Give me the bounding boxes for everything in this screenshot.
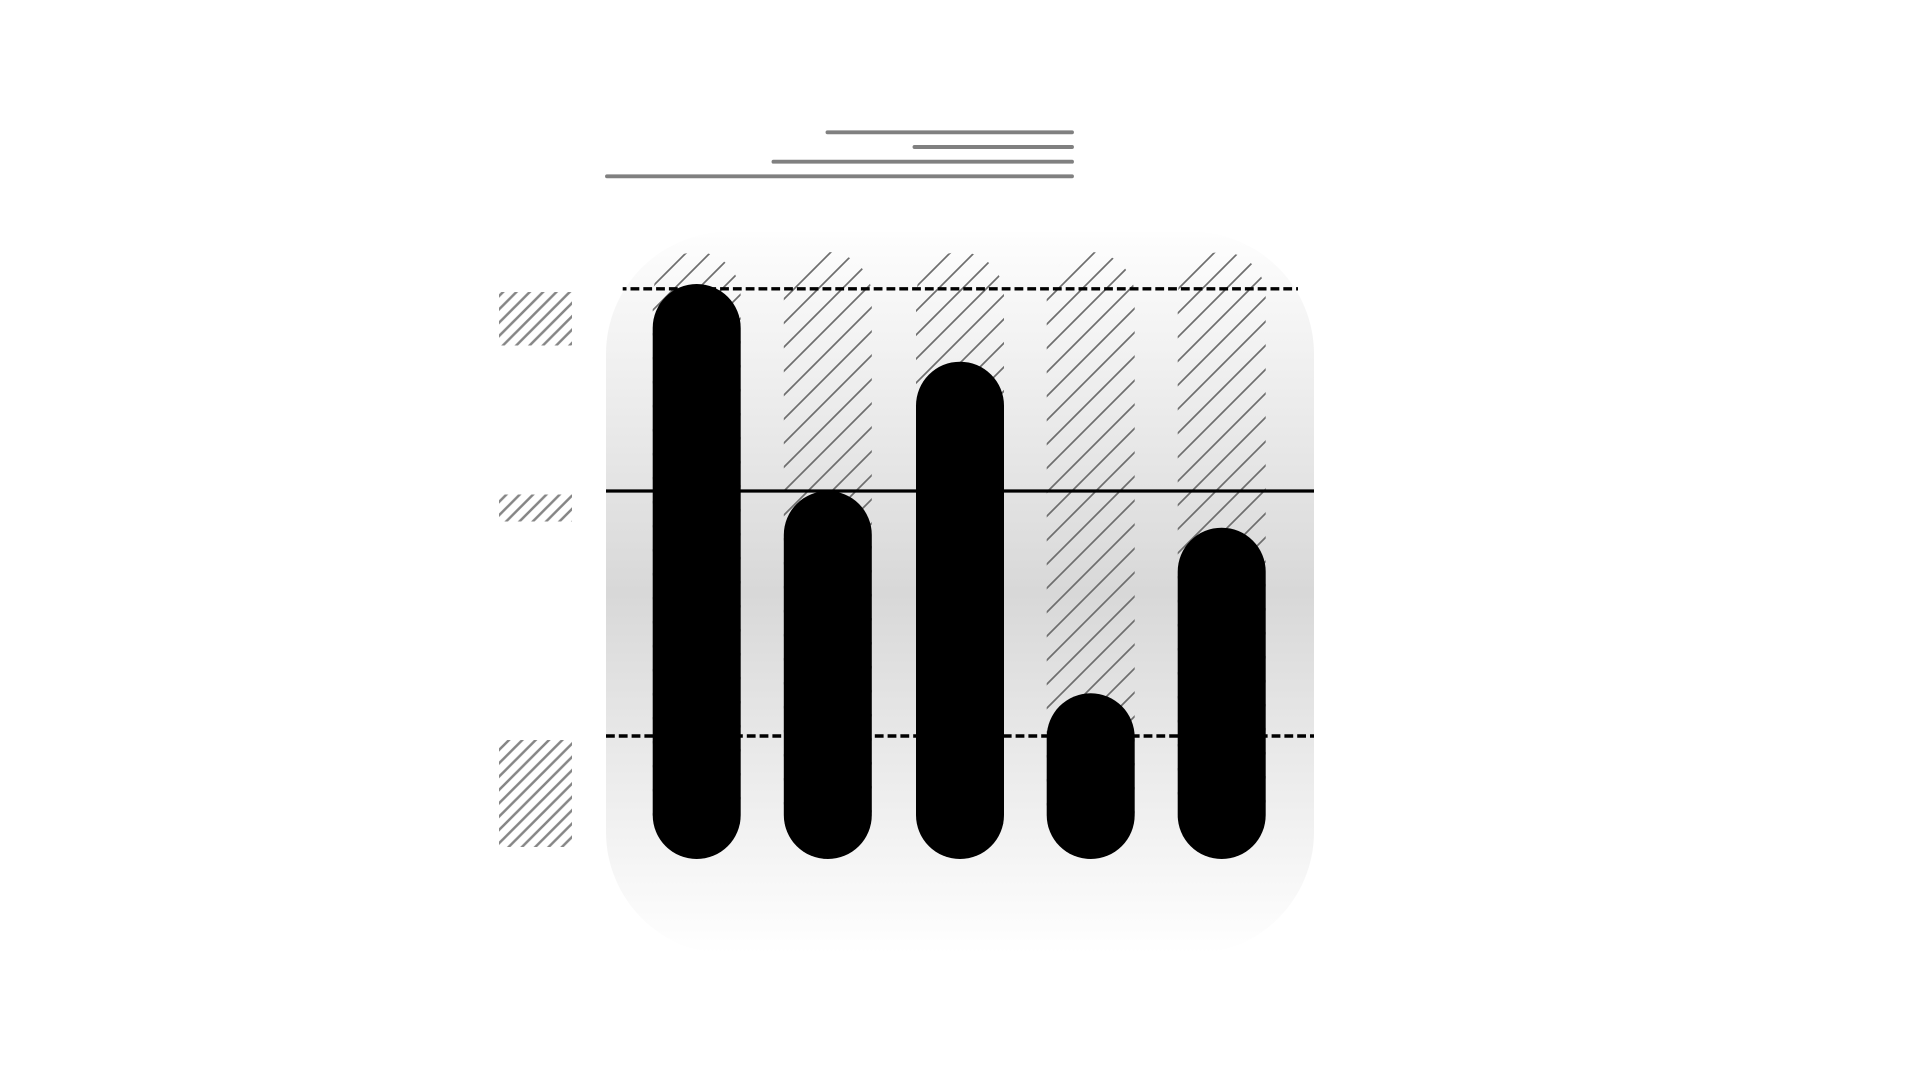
swatch: upper band	[499, 292, 572, 346]
column 4 hatch	[1047, 252, 1135, 859]
hatched column backgrounds	[653, 252, 1266, 859]
swatch: middle band	[499, 494, 572, 522]
bar 4	[1047, 693, 1135, 859]
bar 5	[1178, 528, 1266, 859]
bar 2	[784, 491, 872, 859]
solid middle reference line	[606, 489, 1314, 493]
swatch: lower band	[499, 740, 572, 847]
column 3 hatch	[916, 252, 1004, 859]
top stacked lines	[607, 132, 1072, 176]
bar 3	[916, 362, 1004, 859]
top dashed reference line	[623, 287, 1298, 290]
column 5 hatch	[1178, 252, 1266, 859]
bar 1	[653, 284, 741, 859]
legend swatches	[499, 292, 572, 847]
reference lines	[606, 289, 1314, 736]
panel: chart background	[606, 232, 1314, 954]
bottom dashed reference line	[606, 734, 1314, 738]
column 2 hatch	[784, 252, 872, 859]
column 1 hatch	[653, 252, 741, 859]
bars	[653, 284, 1266, 859]
